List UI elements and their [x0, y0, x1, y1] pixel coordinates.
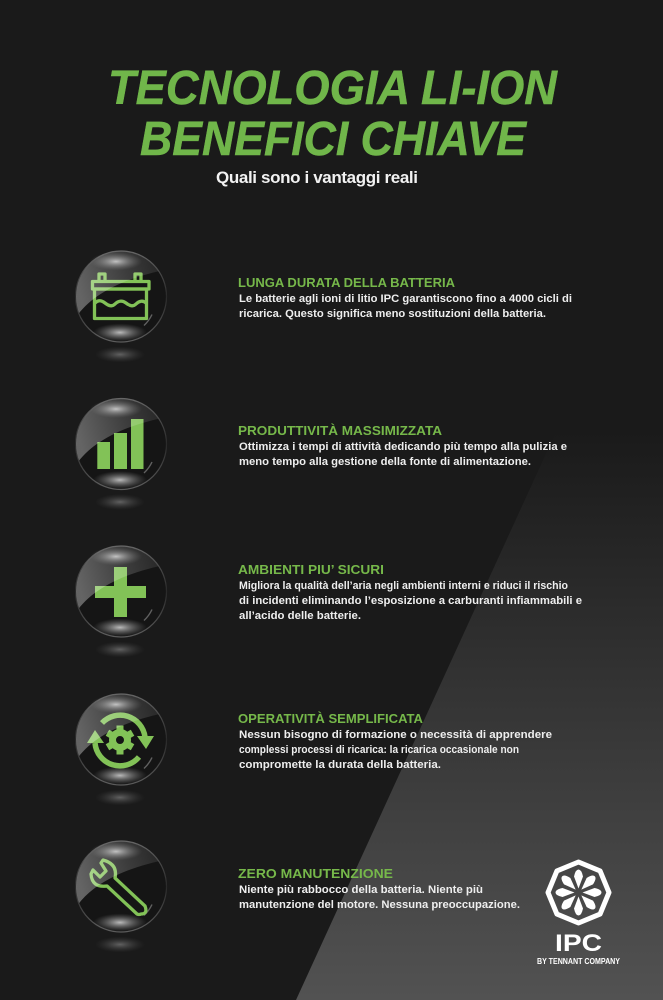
- section: safer environments: all’acido delle batterie.: [239, 610, 361, 622]
- section: battery life: LUNGA DURATA DELLA BATTERIA: [238, 275, 456, 290]
- section: simplified operation: compromette la durata della batteria.: [239, 759, 441, 771]
- icon: wrench sphere: [75, 840, 167, 952]
- section: zero maintenance: manutenzione del motore. Nessuna preoccupazione.: [239, 899, 520, 911]
- section: battery life: [238, 275, 572, 320]
- icon: bars sphere: [75, 398, 167, 510]
- section: simplified operation: Nessun bisogno di formazione o necessità di apprendere: [239, 729, 552, 741]
- section: productivity: PRODUTTIVITÀ MASSIMIZZATA: [238, 423, 443, 438]
- logo: IPC: IPC: [555, 930, 602, 957]
- section: safer environments: di incidenti eliminando l’esposizione a carburanti infiammabili e: [239, 595, 582, 607]
- subtitle: Quali sono i vantaggi reali: [216, 168, 418, 187]
- icon: octagon wheel: [548, 862, 609, 923]
- section: battery life: Le batterie agli ioni di litio IPC garantiscono fino a 4000 cicli di: [239, 293, 572, 305]
- section: productivity: meno tempo alla gestione della fonte di alimentazione.: [239, 456, 531, 468]
- section: simplified operation: OPERATIVITÀ SEMPLIFICATA: [238, 711, 424, 726]
- icon: battery sphere: [75, 250, 167, 362]
- section: zero maintenance: [238, 866, 520, 911]
- title: BENEFICI CHIAVE: [140, 113, 528, 166]
- section: productivity: Ottimizza i tempi di attività dedicando più tempo alla pulizia e: [239, 441, 567, 453]
- title: [108, 62, 558, 166]
- section: battery life: ricarica. Questo significa meno sostituzioni della batteria.: [239, 308, 546, 320]
- section: safer environments: AMBIENTI PIU’ SICURI: [238, 562, 384, 577]
- title: TECNOLOGIA LI-ION: [108, 62, 558, 115]
- section: zero maintenance: Niente più rabbocco della batteria. Niente più: [239, 884, 483, 896]
- diagonal gray panel: [296, 198, 663, 1000]
- icon: gear cycle sphere: [75, 694, 167, 806]
- section: simplified operation: complessi processi di ricarica: la ricarica occasionale non: [239, 744, 519, 756]
- section: safer environments: [238, 562, 582, 622]
- logo: IPC: [537, 862, 621, 966]
- section: simplified operation: [238, 711, 552, 771]
- section: safer environments: Migliora la qualità dell’aria negli ambienti interni e riduci il rischio: [239, 580, 568, 592]
- section: zero maintenance: ZERO MANUTENZIONE: [238, 866, 393, 881]
- section: productivity: [238, 423, 567, 468]
- logo: IPC: BY TENNANT COMPANY: [537, 957, 621, 966]
- icon: plus sphere: [75, 546, 167, 658]
